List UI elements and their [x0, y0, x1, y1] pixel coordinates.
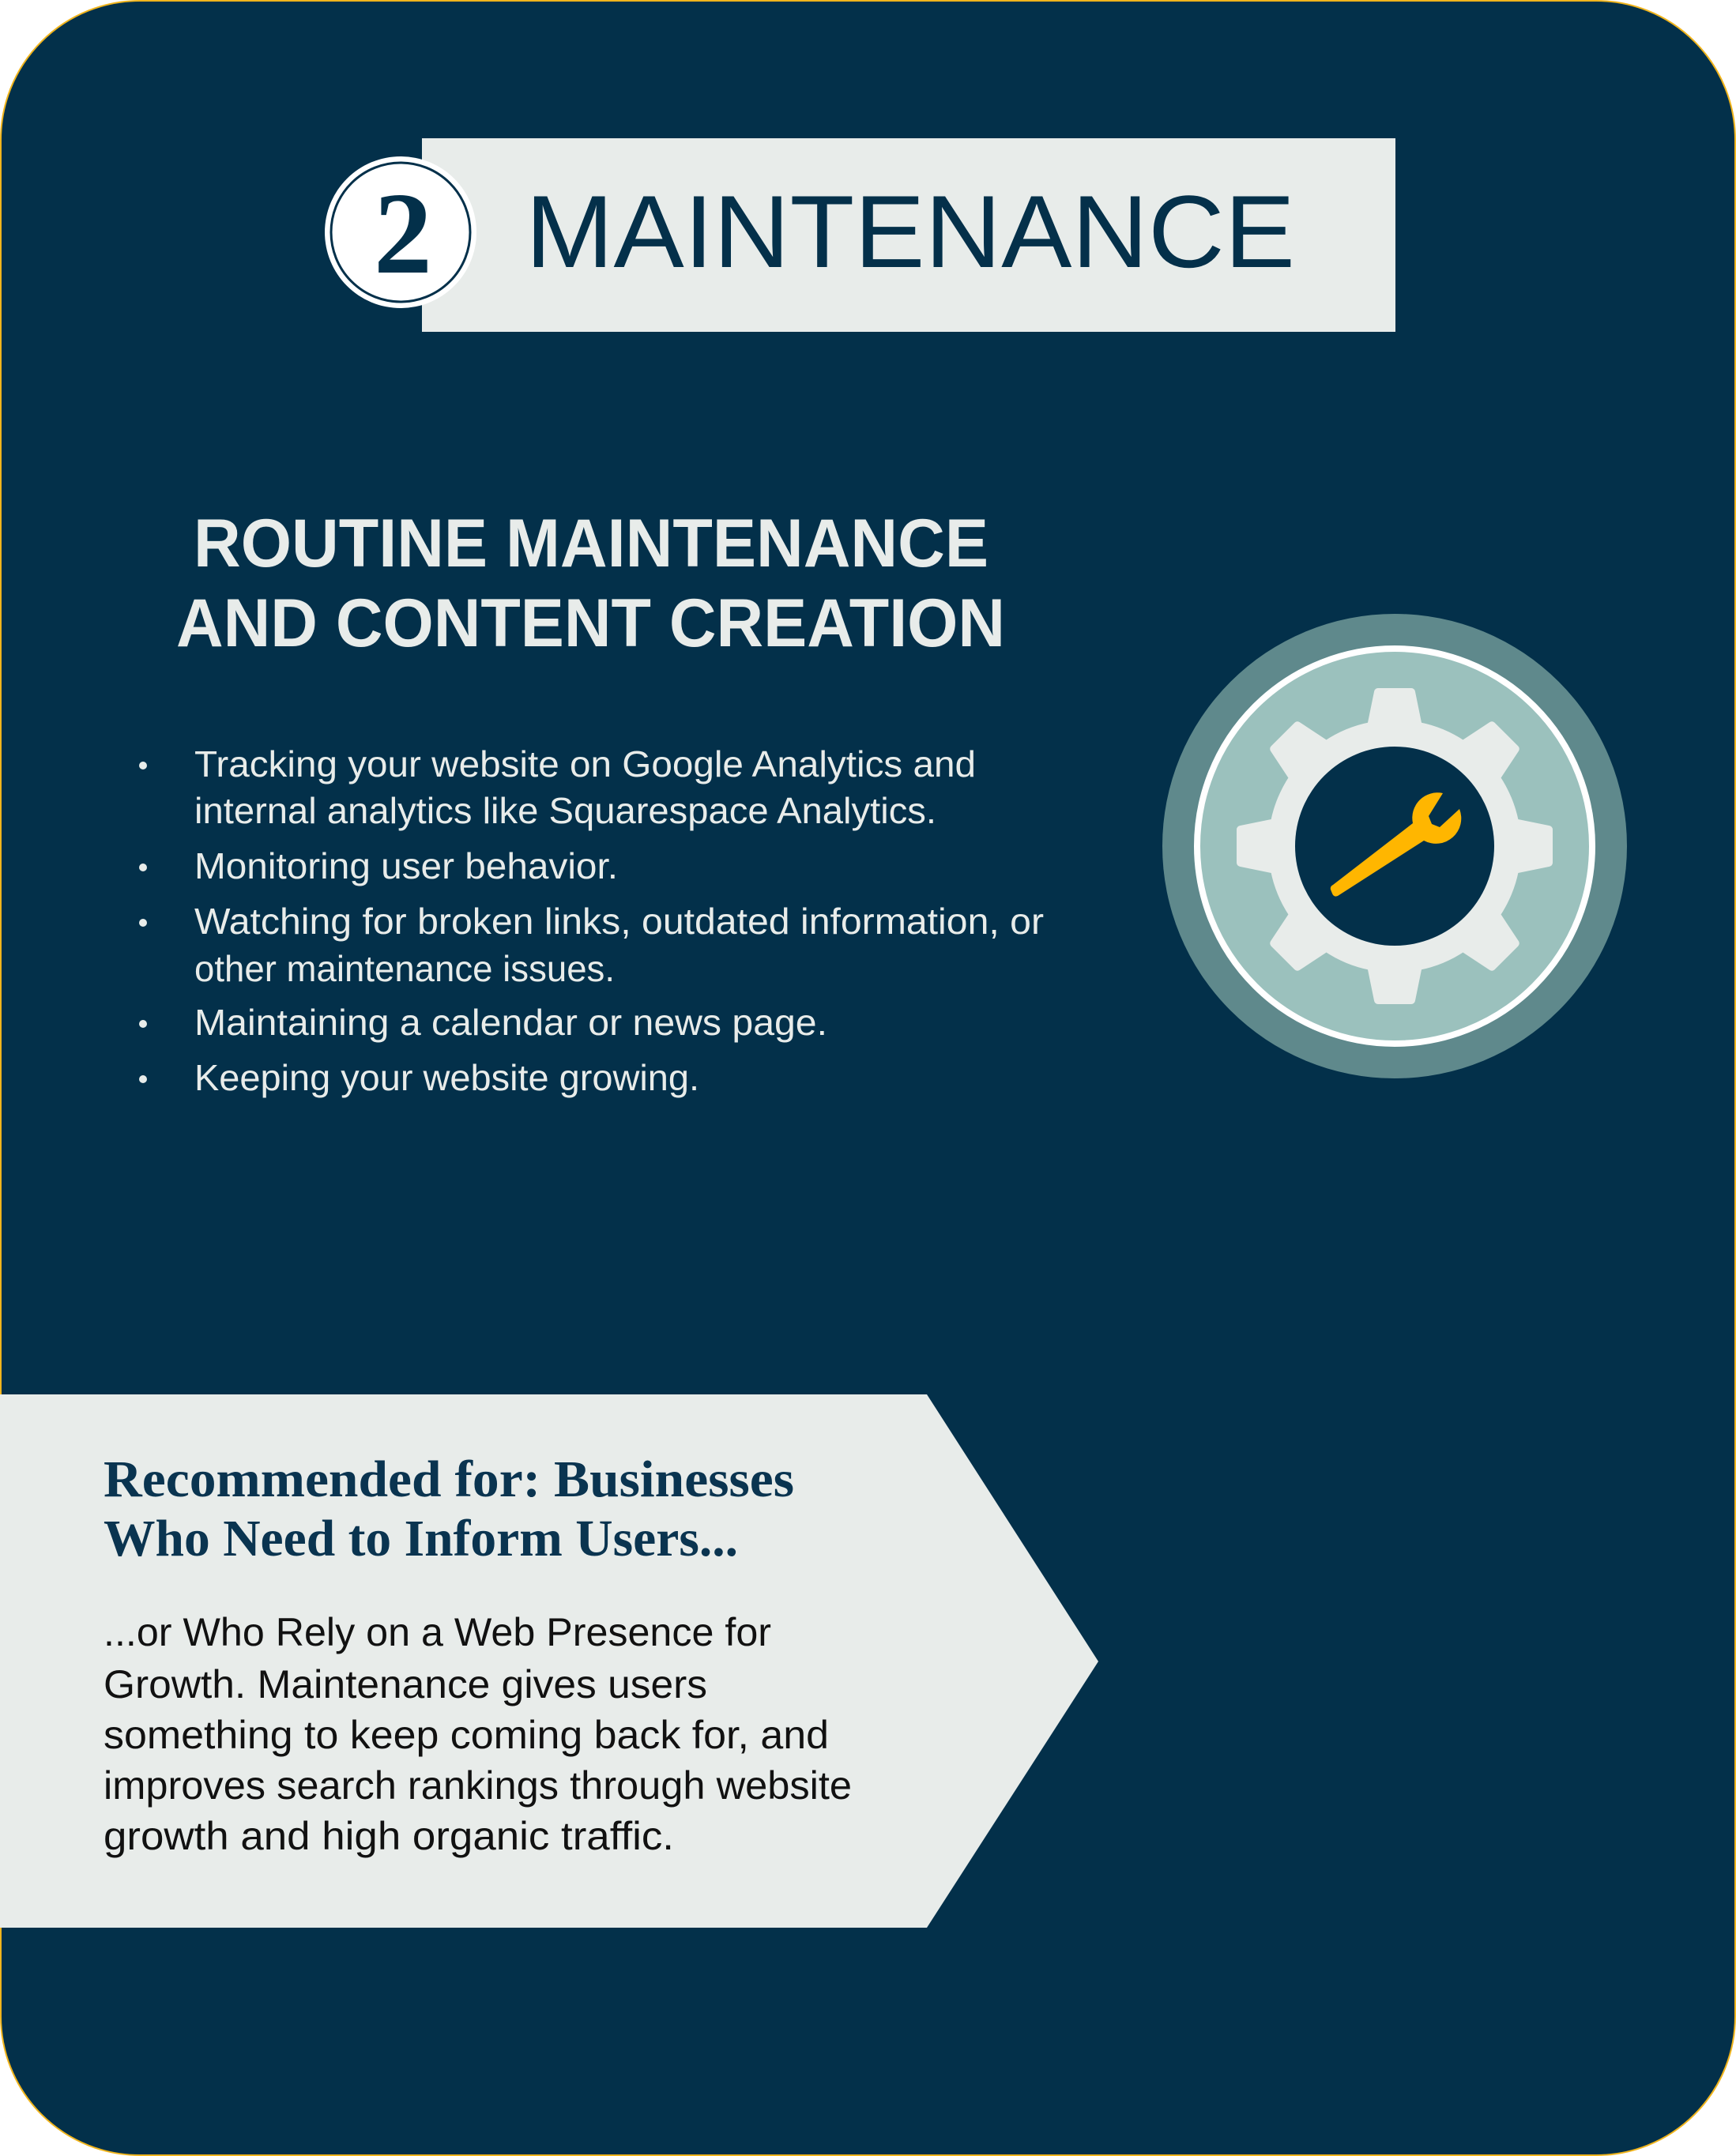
section heading: ROUTINE MAINTENANCE [194, 506, 989, 581]
bullet list: internal analytics like Squarespace Analytics. [194, 790, 936, 831]
panel body text: something to keep coming back for, and [104, 1713, 829, 1757]
bullet list: Keeping your website growing. [194, 1057, 699, 1098]
icon: gear with wrench [1162, 614, 1627, 1078]
bullet list: Watching for broken links, outdated information, or [194, 901, 1044, 942]
panel body text: growth and high organic traffic. [104, 1814, 674, 1858]
panel heading: Who Need to Inform Users... [104, 1510, 738, 1567]
gear [1241, 692, 1549, 1000]
wrench [1331, 792, 1461, 897]
bullet list: other maintenance issues. [194, 948, 615, 989]
section heading: AND CONTENT CREATION [176, 585, 1005, 661]
number badge: 2 [374, 169, 432, 299]
recommendation arrow panel [0, 1394, 1098, 1928]
panel heading [104, 1451, 794, 1567]
header banner [325, 138, 1395, 332]
number badge [325, 156, 476, 308]
panel body text: Growth. Maintenance gives users [104, 1662, 707, 1706]
panel body text: ...or Who Rely on a Web Presence for [104, 1610, 771, 1654]
panel heading: Recommended for: Businesses [104, 1451, 794, 1508]
bullet list: Monitoring user behavior. [194, 845, 618, 886]
bullet list [139, 743, 1044, 1098]
bullet list: Maintaining a calendar or news page. [194, 1002, 827, 1043]
panel body text: improves search rankings through website [104, 1763, 852, 1808]
bullet list: Tracking your website on Google Analytics and [194, 743, 976, 785]
section heading [176, 506, 1005, 661]
panel body text [104, 1610, 852, 1858]
header title: MAINTENANCE [525, 174, 1295, 289]
